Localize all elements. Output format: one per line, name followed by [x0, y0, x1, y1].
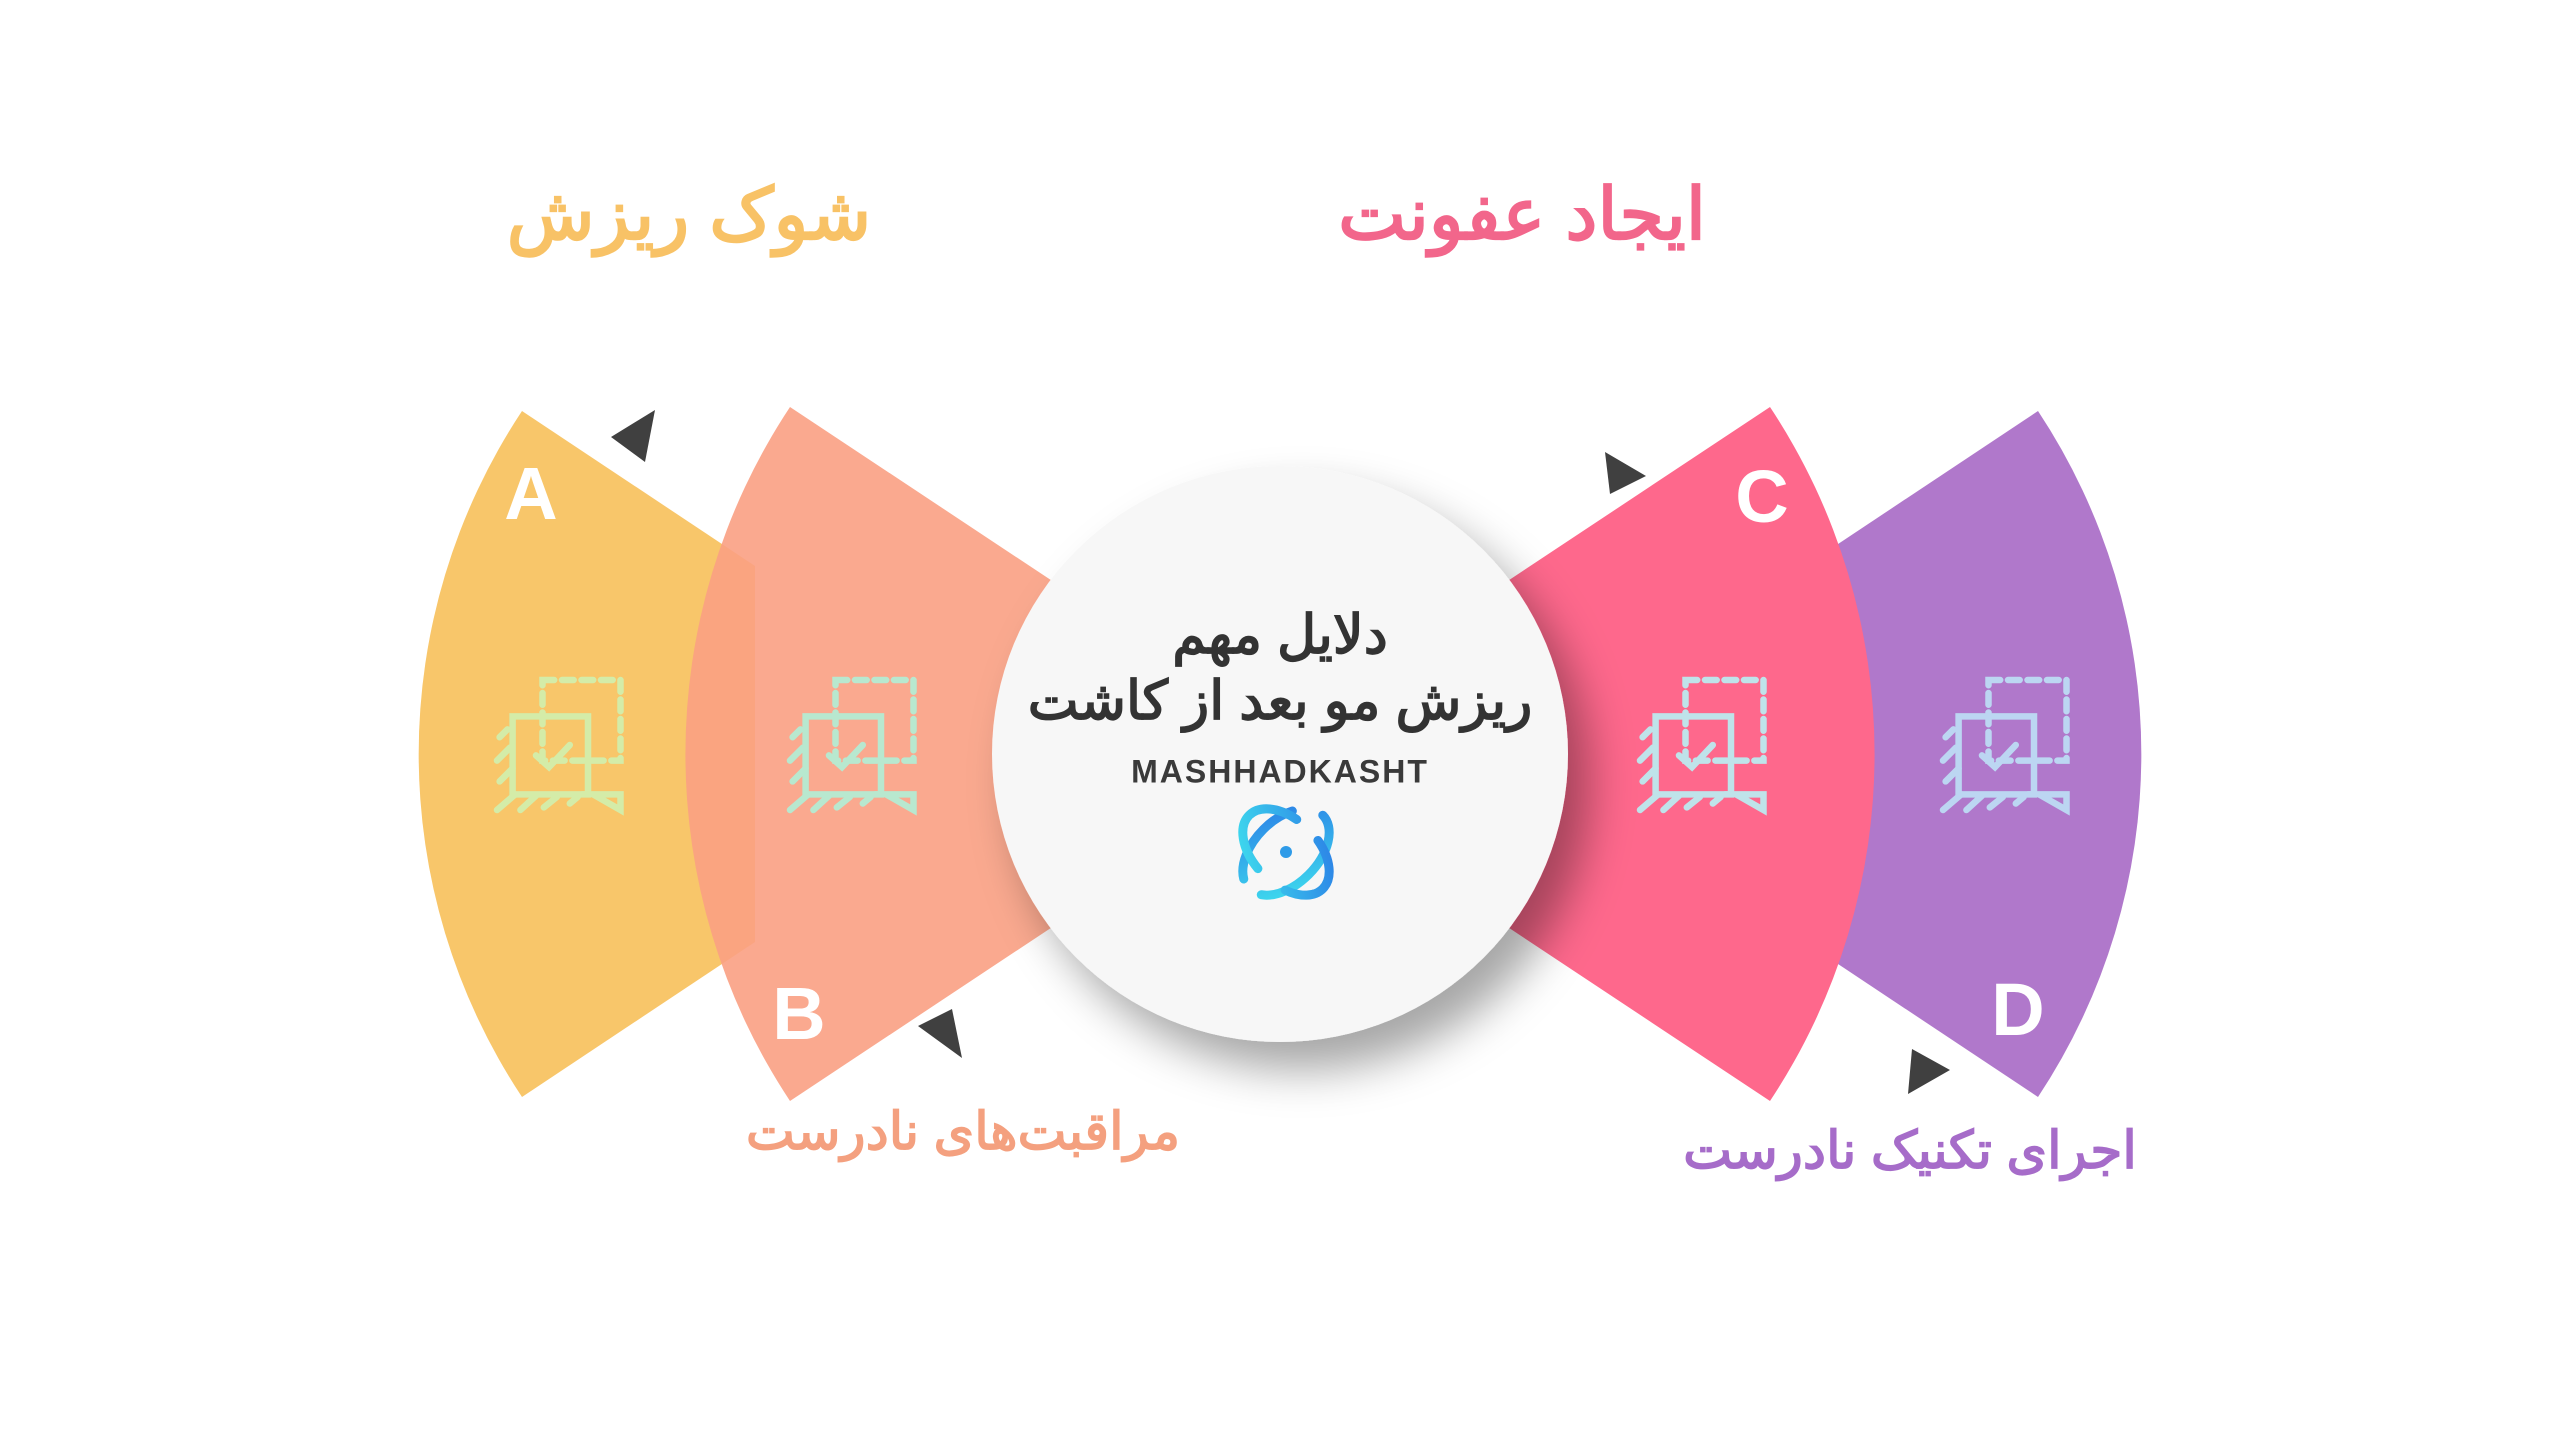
shape C: [1372, 407, 1875, 1101]
title A: شوک ریزش: [507, 175, 871, 255]
arrow B: [918, 1009, 962, 1058]
icon B: [790, 680, 914, 810]
letter B: B: [772, 972, 826, 1055]
logo: [1227, 793, 1345, 911]
title D: اجرای تکنیک نادرست: [1683, 1122, 2137, 1180]
title B: مراقبت‌های نادرست: [746, 1103, 1180, 1161]
shape A: [419, 411, 755, 1097]
arrow A: [611, 410, 655, 462]
center heading: [1028, 605, 1532, 733]
brand: MASHHADKASHT: [1131, 754, 1429, 790]
arrow D: [1908, 1049, 1950, 1094]
letter A: A: [504, 452, 558, 535]
title C: ایجاد عفونت: [1338, 175, 1706, 255]
center heading: ریزش مو بعد از کاشت: [1028, 671, 1532, 731]
icon D: [1943, 680, 2066, 810]
shape D: [1805, 411, 2141, 1097]
icon A: [497, 680, 620, 810]
center circle: [992, 466, 1568, 1042]
shape B: [685, 407, 1188, 1101]
letter D: D: [1991, 968, 2045, 1051]
letter C: C: [1735, 455, 1789, 538]
center heading: دلایل مهم: [1172, 605, 1388, 665]
icon C: [1640, 680, 1764, 810]
arrow C: [1605, 452, 1646, 494]
